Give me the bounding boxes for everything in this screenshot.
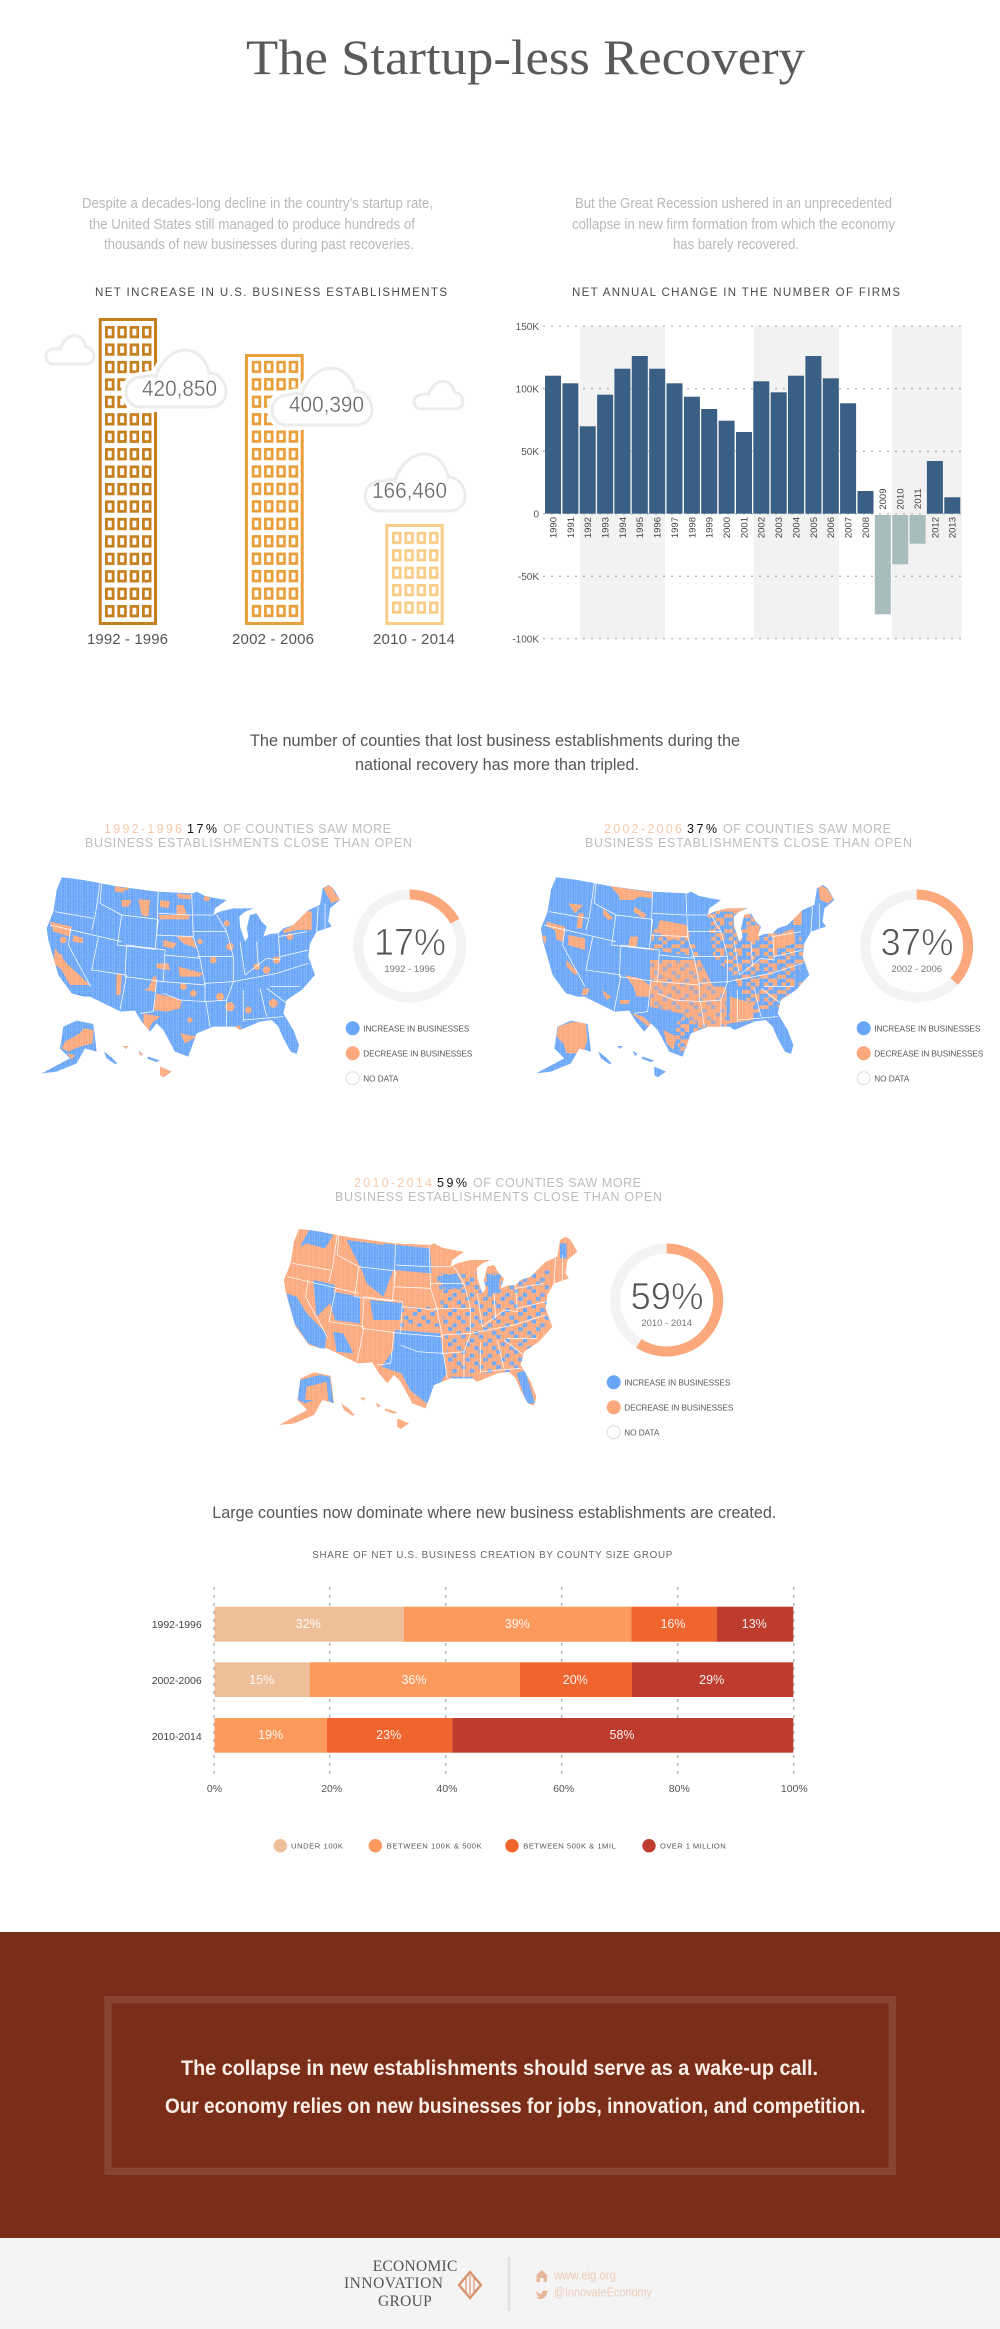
map heading: OF COUNTIES SAW MORE [723, 822, 891, 836]
grid lines [214, 1587, 794, 1776]
year labels: 2010 [896, 488, 907, 510]
icon: building 2002-2006 [246, 356, 302, 624]
year labels: 1995 [635, 517, 646, 538]
y axis labels: -100K [512, 634, 539, 646]
chart heading: NET ANNUAL CHANGE IN THE NUMBER OF FIRMS [572, 287, 900, 299]
legend: NO DATA [363, 1074, 399, 1083]
banner text: Our economy relies on new businesses for jobs, innovation, and competition. [165, 2095, 866, 2118]
legend [346, 1021, 473, 1085]
icon: building 1992-1996 [100, 320, 156, 624]
twitter handle: @InnovateEconomy [554, 2286, 653, 2300]
logo wordmark: INNOVATION [344, 2275, 443, 2292]
year labels: 2001 [739, 517, 750, 538]
x axis labels: 40% [436, 1783, 458, 1795]
bar: 1992-1996: 32% [296, 1617, 321, 1631]
donut: 59% [615, 1248, 718, 1352]
year labels: 2002 [757, 517, 768, 538]
year labels: 1991 [566, 517, 577, 538]
callout: cloud 166,460: 166,460 [372, 478, 447, 503]
y axis labels: -50K [518, 572, 539, 583]
panel: footer [0, 2238, 1000, 2329]
bar: 2002-2006 [214, 1662, 793, 1697]
map heading: BUSINESS ESTABLISHMENTS CLOSE THAN OPEN [85, 836, 412, 850]
year labels: 1992 [583, 517, 594, 538]
recovery period bands [580, 326, 962, 639]
bar: 2010-2014: 58% [609, 1728, 635, 1742]
donut: 37%: 2002 - 2006 [891, 964, 942, 975]
period labels: 2002 - 2006 [232, 631, 314, 648]
x axis labels: 0% [207, 1783, 222, 1795]
panel: map 2010-2014 [271, 1176, 734, 1439]
year labels: 2007 [844, 517, 854, 538]
x axis labels [207, 1783, 808, 1795]
icon: small cloud right [414, 381, 463, 409]
icon: logo diamond [459, 2272, 481, 2298]
divider [508, 2257, 510, 2311]
row labels: 2010-2014 [152, 1731, 202, 1743]
section heading: counties: The number of counties that lost business establishments during the [250, 732, 740, 750]
bar: 2002-2006: 36% [401, 1673, 427, 1687]
year labels: 2011 [913, 488, 924, 509]
bar: 1992-1996 [214, 1607, 793, 1642]
bar: 2002-2006: 29% [699, 1673, 724, 1687]
panel: map 1992-1996 [33, 822, 473, 1085]
legend: DECREASE IN BUSINESSES [874, 1049, 984, 1058]
logo wordmark: GROUP [378, 2293, 432, 2310]
legend: BETWEEN 500K & 1MIL [523, 1842, 616, 1850]
year labels: 2009 [878, 488, 889, 510]
year labels: 1990 [548, 517, 559, 538]
section heading: counties: national recovery has more than tripled. [355, 756, 639, 774]
choropleth map [536, 878, 834, 1078]
text block: left intro: Despite a decades-long decline in the country’s startup rate, [82, 196, 433, 212]
bar: 2002-2006: 20% [563, 1673, 588, 1687]
panel: net annual change bar chart [512, 287, 962, 646]
choropleth map [279, 1229, 578, 1429]
legend: INCREASE IN BUSINESSES [624, 1378, 731, 1387]
panel: stacked bar chart [152, 1550, 808, 1852]
map heading: 2002-2006 [604, 822, 682, 836]
legend [274, 1839, 726, 1852]
text block: right intro: But the Great Recession ushered in an unprecedented [575, 196, 892, 212]
year labels: 1998 [687, 517, 698, 538]
map heading: OF COUNTIES SAW MORE [223, 822, 391, 836]
period labels [87, 631, 455, 648]
row labels [152, 1619, 202, 1743]
x axis labels: 60% [553, 1783, 574, 1795]
text block: right intro: collapse in new firm formation from which the economy [572, 217, 896, 233]
logo wordmark: ECONOMIC [373, 2258, 457, 2275]
year labels: 1994 [618, 517, 629, 538]
x axis labels: 20% [321, 1783, 342, 1795]
bar: 1992-1996: 13% [742, 1617, 767, 1631]
donut: 59%: 59% [630, 1276, 704, 1318]
row labels: 2002-2006 [152, 1675, 202, 1687]
donut: 37%: 37% [880, 922, 954, 964]
year labels: 2003 [774, 517, 785, 538]
y axis labels: 50K [521, 447, 539, 458]
legend: INCREASE IN BUSINESSES [874, 1024, 981, 1033]
bar: 1992-1996: 39% [505, 1617, 530, 1631]
year labels: 2005 [809, 517, 820, 538]
year labels: 1997 [670, 517, 681, 538]
legend [857, 1021, 984, 1085]
y axis labels [512, 322, 539, 646]
icon: small cloud left [46, 336, 94, 364]
y axis labels: 0 [533, 510, 539, 520]
x axis labels: 100% [781, 1783, 808, 1795]
bar: 2002-2006: 15% [249, 1673, 274, 1687]
legend [607, 1375, 734, 1439]
map heading [335, 1176, 662, 1204]
bar: 2010-2014: 23% [376, 1728, 401, 1742]
year labels: 1993 [600, 517, 612, 538]
chart heading: NET INCREASE IN U.S. BUSINESS ESTABLISHMENTS [95, 287, 447, 299]
callout: cloud 400,390: 400,390 [289, 392, 364, 417]
map heading: OF COUNTIES SAW MORE [473, 1176, 641, 1190]
chart heading: SHARE OF NET U.S. BUSINESS CREATION BY COUNTY SIZE GROUP [312, 1550, 673, 1561]
year labels: 2006 [826, 517, 837, 538]
legend: BETWEEN 100K & 500K [387, 1842, 482, 1850]
legend: OVER 1 MILLION [660, 1842, 726, 1850]
period labels: 1992 - 1996 [87, 631, 168, 648]
panel: net increase building chart [46, 287, 465, 648]
legend: NO DATA [624, 1428, 660, 1437]
panel: map 2002-2006 [528, 822, 984, 1085]
callout: cloud 166,460 [365, 454, 465, 511]
row labels: 1992-1996 [152, 1619, 202, 1631]
map heading: BUSINESS ESTABLISHMENTS CLOSE THAN OPEN [585, 836, 912, 850]
callout: cloud 420,850 [126, 350, 226, 407]
legend: INCREASE IN BUSINESSES [363, 1024, 470, 1033]
text block: left intro: thousands of new businesses during past recoveries. [104, 237, 414, 253]
map heading: 59% [437, 1176, 467, 1190]
icon: building 2010-2014 [387, 526, 442, 624]
panel: call to action banner [0, 1932, 1000, 2238]
text block: left intro: the United States still managed to produce hundreds of [89, 217, 416, 233]
section heading: large counties: Large counties now dominate where new business establishments are created. [212, 1503, 776, 1522]
year labels: 2008 [861, 517, 872, 538]
map heading: 2010-2014 [354, 1176, 432, 1190]
section heading: counties [250, 732, 740, 774]
icon: twitter [536, 2290, 548, 2299]
text block: right intro [572, 196, 896, 253]
year labels: 1999 [705, 517, 716, 538]
website: www.eig.org [553, 2268, 616, 2282]
map heading [85, 822, 412, 850]
icon: home [536, 2270, 547, 2282]
legend: DECREASE IN BUSINESSES [363, 1049, 473, 1058]
year labels: 2013 [948, 517, 959, 538]
map heading [585, 822, 912, 850]
callout: cloud 400,390 [272, 368, 372, 425]
text block: left intro [82, 196, 433, 253]
positive bars [545, 356, 960, 514]
bar: 2010-2014 [214, 1718, 793, 1753]
text block: right intro: has barely recovered. [673, 237, 799, 253]
grid lines [543, 326, 962, 639]
logo wordmark [344, 2258, 457, 2310]
period labels: 2010 - 2014 [373, 631, 455, 648]
y axis labels: 100K [516, 384, 539, 396]
donut: 37% [865, 894, 968, 998]
year labels: 2004 [791, 517, 802, 538]
callout: cloud 420,850: 420,850 [142, 376, 217, 401]
donut: 17%: 17% [374, 922, 446, 964]
legend: DECREASE IN BUSINESSES [624, 1403, 734, 1412]
legend: UNDER 100K [291, 1842, 343, 1850]
map heading: 17% [187, 822, 217, 836]
year labels: 1996 [653, 517, 664, 538]
map heading: 1992-1996 [104, 822, 182, 836]
bar: 1992-1996: 16% [660, 1617, 686, 1631]
negative bars [875, 515, 926, 614]
y axis labels: 150K [516, 322, 539, 333]
donut: 17%: 1992 - 1996 [384, 964, 435, 975]
banner text [165, 2057, 866, 2118]
year labels: 2000 [722, 517, 733, 538]
choropleth map [42, 878, 340, 1078]
legend: NO DATA [874, 1074, 910, 1083]
year labels: 2012 [930, 517, 941, 538]
frame [108, 2000, 892, 2171]
title: The Startup-less Recovery [246, 29, 805, 85]
map heading: BUSINESS ESTABLISHMENTS CLOSE THAN OPEN [335, 1190, 662, 1204]
map heading: 37% [687, 822, 717, 836]
year labels [548, 488, 959, 538]
bar: 2010-2014: 19% [258, 1728, 283, 1742]
donut: 17% [358, 894, 461, 998]
donut: 59%: 2010 - 2014 [641, 1318, 692, 1329]
x axis labels: 80% [669, 1783, 690, 1795]
banner text: The collapse in new establishments should serve as a wake-up call. [181, 2057, 818, 2080]
